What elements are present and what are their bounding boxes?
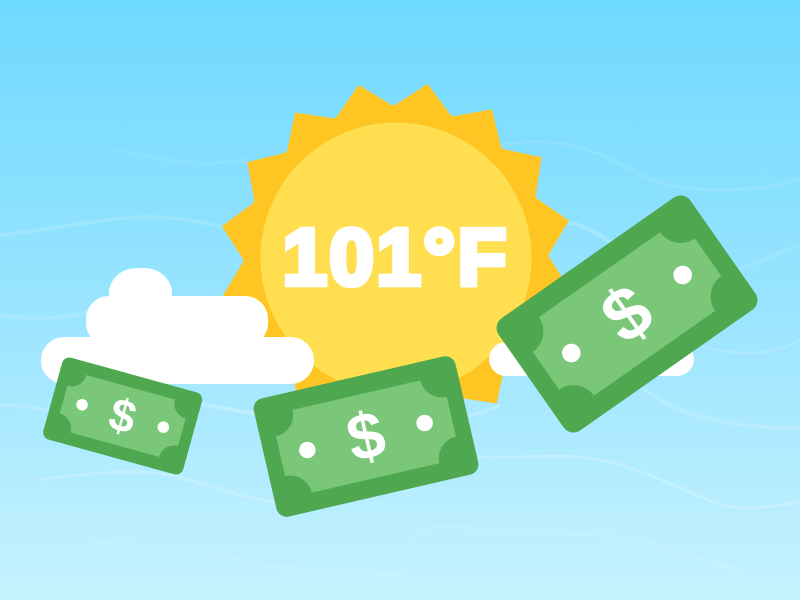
sun disc [260,122,532,394]
sun [217,79,575,437]
bill: middle: $ [340,396,392,476]
temperature label: 101°F [282,212,506,301]
bill: large right: $ [586,268,667,359]
wind lines [0,142,800,575]
cloud: left [41,268,314,384]
bill: small left [41,356,204,476]
bill: middle [251,354,481,519]
sun rays [217,79,575,437]
bill: small left: $ [104,387,142,444]
bill: large right [492,191,762,437]
cloud: right [489,342,694,376]
